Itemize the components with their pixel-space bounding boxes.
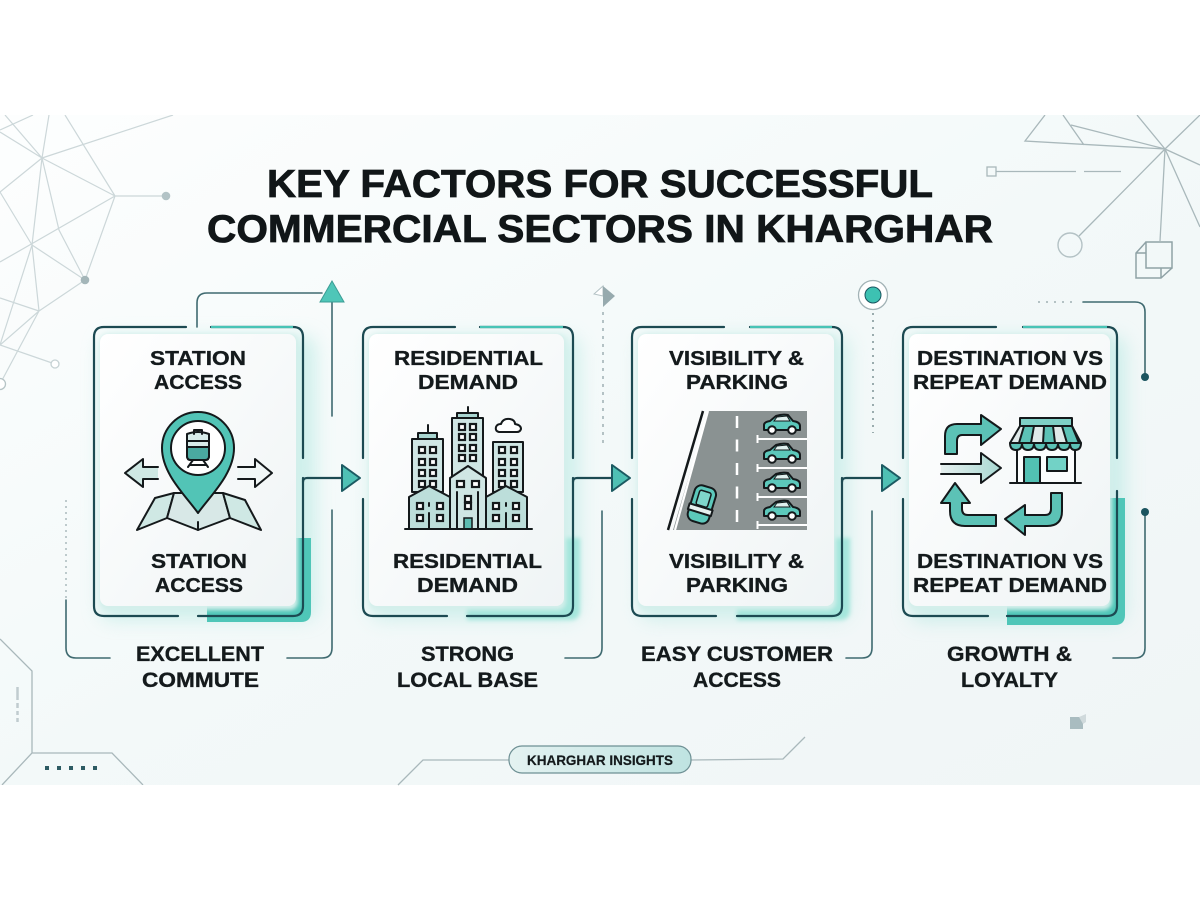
heading: residential demand top xyxy=(394,348,543,394)
heading: visibility and parking bottom: PARKING xyxy=(686,575,788,597)
caption: growth and loyalty: LOYALTY xyxy=(961,669,1058,692)
caption: growth and loyalty xyxy=(947,643,1072,692)
connector: dotted line with flag marker xyxy=(594,286,615,443)
heading: destination vs repeat demand top xyxy=(913,348,1107,394)
heading: residential demand top: RESIDENTIAL xyxy=(394,348,543,370)
title xyxy=(207,163,993,251)
caption: excellent commute: EXCELLENT xyxy=(136,643,264,666)
caption: easy customer access: ACCESS xyxy=(693,669,781,692)
panel: station access xyxy=(94,327,316,622)
panel: residential demand xyxy=(363,327,580,620)
connector: top arrow from station access xyxy=(197,281,344,416)
heading: station access top: ACCESS xyxy=(154,372,242,394)
background xyxy=(0,115,1200,785)
badge: kharghar insights xyxy=(398,737,805,785)
circuit decoration: bottom left xyxy=(0,639,143,785)
caption: excellent commute: COMMUTE xyxy=(142,669,259,692)
connector: caption line for strong local base xyxy=(565,511,602,658)
panel: visibility and parking xyxy=(632,327,850,620)
heading: station access bottom xyxy=(151,551,247,597)
icon: small square marker xyxy=(1070,714,1086,729)
icon: station pin on map xyxy=(125,412,272,530)
arrow: visibility and parking to destination xyxy=(842,465,900,491)
caption: strong local base: STRONG xyxy=(421,643,514,666)
network decoration: top left xyxy=(0,115,173,390)
connector: caption line for growth and loyalty xyxy=(1113,508,1149,658)
title: KEY FACTORS FOR SUCCESSFUL xyxy=(267,163,933,206)
heading: residential demand top: DEMAND xyxy=(418,372,518,394)
caption: excellent commute xyxy=(136,643,264,692)
icon: storefront with cycle arrows xyxy=(941,415,1081,535)
caption: growth and loyalty: GROWTH & xyxy=(947,643,1072,666)
connector: top right line with end dot xyxy=(1038,302,1149,381)
icon: road and parking xyxy=(668,411,807,530)
heading: destination vs repeat demand top: DESTINATION VS xyxy=(917,348,1103,370)
heading: destination vs repeat demand bottom: REPEAT DEMAND xyxy=(913,575,1107,597)
heading: destination vs repeat demand top: REPEAT DEMAND xyxy=(913,372,1107,394)
heading: visibility and parking top: VISIBILITY & xyxy=(669,348,804,370)
connector: dotted line with target marker xyxy=(858,280,888,433)
heading: station access bottom: STATION xyxy=(151,551,247,573)
heading: residential demand bottom xyxy=(393,551,542,597)
heading: station access top xyxy=(150,348,246,394)
connector: caption line for excellent commute xyxy=(66,500,332,658)
caption: easy customer access xyxy=(641,643,833,692)
connector: caption line for easy customer access xyxy=(846,511,872,658)
heading: destination vs repeat demand bottom: DESTINATION VS xyxy=(917,551,1103,573)
arrow: station access to residential demand xyxy=(303,465,360,491)
heading: visibility and parking top xyxy=(669,348,804,394)
heading: residential demand bottom: DEMAND xyxy=(417,575,518,597)
arrow: residential demand to visibility and parking xyxy=(573,465,630,491)
title: COMMERCIAL SECTORS IN KHARGHAR xyxy=(207,208,993,251)
badge: kharghar insights: KHARGHAR INSIGHTS xyxy=(527,752,673,768)
panel: destination vs repeat demand xyxy=(903,327,1126,625)
heading: visibility and parking bottom xyxy=(669,551,804,597)
heading: residential demand bottom: RESIDENTIAL xyxy=(393,551,542,573)
heading: station access top: STATION xyxy=(150,348,246,370)
heading: station access bottom: ACCESS xyxy=(155,575,243,597)
heading: visibility and parking top: PARKING xyxy=(686,372,788,394)
caption: strong local base: LOCAL BASE xyxy=(397,669,538,692)
heading: visibility and parking bottom: VISIBILITY & xyxy=(669,551,804,573)
heading: destination vs repeat demand bottom xyxy=(913,551,1107,597)
infographic canvas xyxy=(0,115,1200,786)
network decoration: top right xyxy=(987,115,1200,278)
caption: strong local base xyxy=(397,643,538,692)
icon: residential buildings xyxy=(405,407,532,529)
caption: easy customer access: EASY CUSTOMER xyxy=(641,643,833,666)
